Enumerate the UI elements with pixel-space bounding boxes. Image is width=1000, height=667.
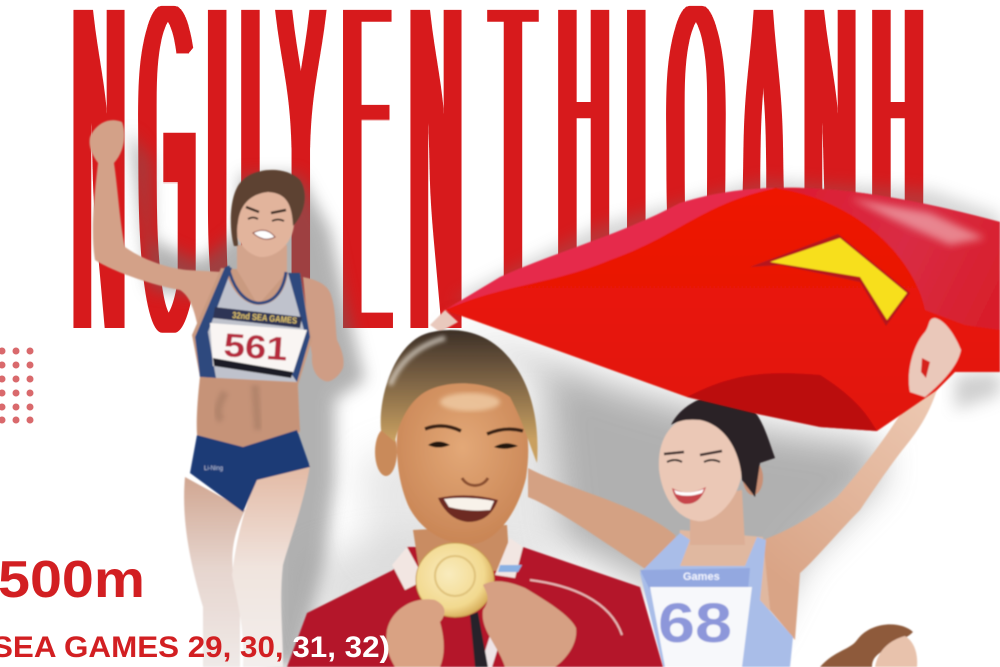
figure: runner with bib 561 bbox=[89, 120, 344, 667]
bib number 68: 68 bbox=[658, 591, 732, 654]
decorative dot grid bbox=[0, 348, 34, 424]
bib number 561: 561 bbox=[223, 326, 289, 367]
shadow: flag and figures bbox=[130, 130, 1000, 667]
event distance: 500m bbox=[0, 551, 145, 609]
flag star bbox=[750, 234, 910, 326]
flag: Vietnamese flag bbox=[430, 188, 1000, 431]
figure: partial head bottom right bbox=[820, 624, 917, 667]
bib band text: 32nd SEA GAMES bbox=[232, 310, 297, 326]
bib text Games: Games bbox=[683, 571, 720, 583]
games list: SEA GAMES 29, 30, 31, 32) bbox=[0, 631, 390, 664]
figure: runner with bib 561: Li-Ning bbox=[204, 466, 223, 472]
figure: smiling athlete with gold medal bbox=[287, 330, 663, 667]
figure: woman holding flag, bib 68 bbox=[528, 390, 937, 667]
